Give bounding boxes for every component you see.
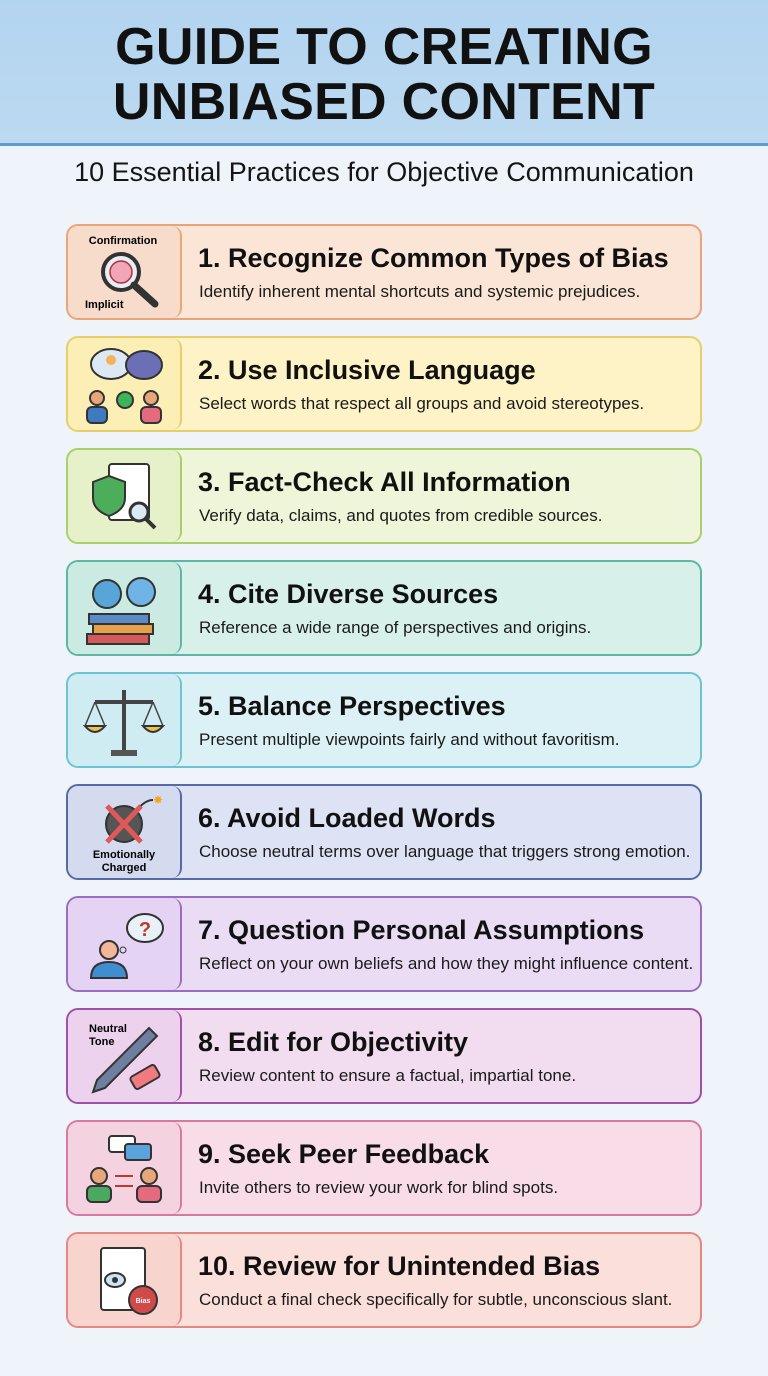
title 1: 1. Recognize Common Types of Bias xyxy=(198,243,669,273)
desc 6: Choose neutral terms over language that triggers strong emotion. xyxy=(199,842,690,861)
title 10: 10. Review for Unintended Bias xyxy=(198,1251,600,1281)
desc 5: Present multiple viewpoints fairly and without favoritism. xyxy=(199,730,619,749)
icon: crossed bomb: ✸ xyxy=(153,793,163,807)
subtitle: 10 Essential Practices for Objective Communication xyxy=(74,157,694,187)
card 10 xyxy=(66,1232,702,1328)
desc 8: Review content to ensure a factual, impartial tone. xyxy=(199,1066,576,1085)
desc 7: Reflect on your own beliefs and how they might influence content. xyxy=(199,954,693,973)
icon: books globes xyxy=(68,562,182,654)
icon: pen eraser xyxy=(68,1010,182,1102)
desc 10: Conduct a final check specifically for subtle, unconscious slant. xyxy=(199,1290,672,1309)
icon: magnifier brain xyxy=(68,226,182,318)
title 8: 8. Edit for Objectivity xyxy=(198,1027,468,1057)
title: GUIDE TO CREATING xyxy=(115,18,653,76)
desc 3: Verify data, claims, and quotes from credible sources. xyxy=(199,506,602,525)
card 9 xyxy=(66,1120,702,1216)
icon: peer feedback xyxy=(68,1122,182,1214)
desc 1: Identify inherent mental shortcuts and systemic prejudices. xyxy=(199,282,640,301)
icon: document eye stamp xyxy=(68,1234,182,1326)
icon: crossed bomb xyxy=(68,786,182,878)
desc 9: Invite others to review your work for blind spots. xyxy=(199,1178,558,1197)
icon: magnifier brain: Implicit xyxy=(85,299,124,311)
icon: people speech xyxy=(68,338,182,430)
title: UNBIASED CONTENT xyxy=(113,73,655,131)
title 7: 7. Question Personal Assumptions xyxy=(198,915,644,945)
icon: document shield xyxy=(68,450,182,542)
card 5 xyxy=(66,672,702,768)
title 6: 6. Avoid Loaded Words xyxy=(198,803,496,833)
title 5: 5. Balance Perspectives xyxy=(198,691,506,721)
icon: document eye stamp: Bias xyxy=(136,1298,150,1305)
card 6 xyxy=(66,784,702,880)
card 1 xyxy=(66,224,702,320)
icon: pen eraser: Neutral xyxy=(89,1023,127,1035)
title 3: 3. Fact-Check All Information xyxy=(198,467,571,497)
desc 4: Reference a wide range of perspectives and origins. xyxy=(199,618,591,637)
desc 2: Select words that respect all groups and avoid stereotypes. xyxy=(199,394,644,413)
icon: crossed bomb: Charged xyxy=(102,862,146,874)
card 2 xyxy=(66,336,702,432)
card 7 xyxy=(66,896,702,992)
icon: pen eraser: Tone xyxy=(89,1036,114,1048)
icon: crossed bomb: Emotionally xyxy=(93,849,156,861)
card 4 xyxy=(66,560,702,656)
title 9: 9. Seek Peer Feedback xyxy=(198,1139,489,1169)
header band xyxy=(0,0,768,146)
icon: person thinking xyxy=(68,898,182,990)
card 8 xyxy=(66,1008,702,1104)
card 3 xyxy=(66,448,702,544)
icon: person thinking: ? xyxy=(139,919,151,941)
title 2: 2. Use Inclusive Language xyxy=(198,355,536,385)
icon: scale xyxy=(68,674,182,766)
title 4: 4. Cite Diverse Sources xyxy=(198,579,498,609)
icon: magnifier brain: Confirmation xyxy=(89,235,157,247)
title xyxy=(113,18,655,131)
